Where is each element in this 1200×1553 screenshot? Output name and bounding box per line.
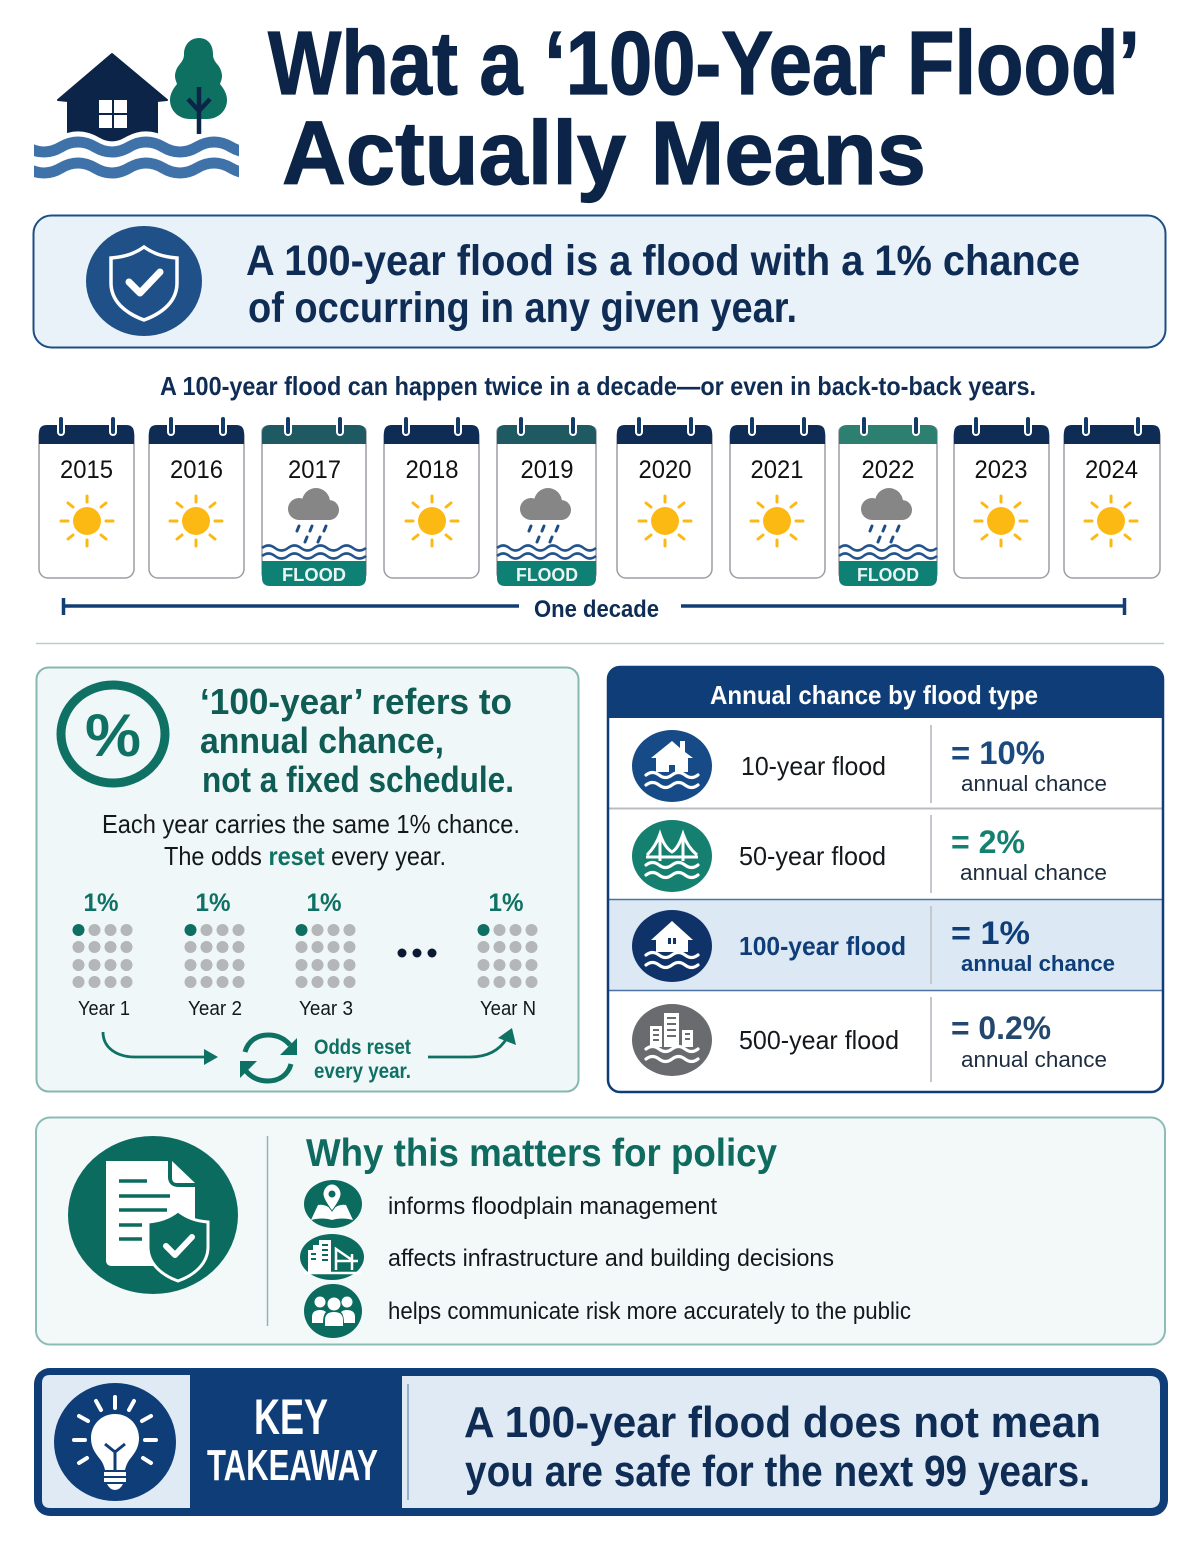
row: 50-year flood [632, 820, 1107, 892]
calendar 2017 flood: 2017 [288, 456, 341, 484]
calendar 2016 [149, 419, 244, 578]
heading: Why this matters for policy [306, 1132, 777, 1175]
highlight row [609, 900, 1162, 990]
table header [608, 667, 1163, 718]
reset label: every year. [314, 1060, 411, 1083]
heading: annual chance, [200, 720, 444, 761]
row: 10-year flood [632, 730, 1107, 802]
subheading: A 100-year flood can happen twice in a decade—or even in back-to-back years. [160, 371, 1036, 401]
definition text: A 100-year flood is a flood with a 1% chance [246, 237, 1080, 285]
row: 100-year flood: 100-year flood [739, 931, 906, 961]
icon: policy document with shield [68, 1136, 238, 1294]
panel: definition banner [34, 216, 1166, 348]
item: communicate risk to the public: helps communicate risk more accurately to the public [388, 1298, 911, 1325]
year 2 dots: 1% [196, 889, 230, 917]
definition text [246, 237, 1080, 332]
heading [200, 681, 514, 800]
row: 500-year flood: annual chance [961, 1047, 1107, 1072]
panel: annual chance by flood type table [608, 667, 1163, 1092]
calendar 2017 flood: FLOOD [282, 565, 346, 585]
icon: lightbulb [54, 1383, 176, 1501]
row: 50-year flood: = 2% [951, 824, 1025, 860]
arrow: year 1 to reset [103, 1032, 218, 1065]
calendar 2020: 2020 [638, 456, 692, 484]
icon: percent ring: % [85, 702, 141, 769]
calendar 2021 [730, 419, 825, 578]
body text: Each year carries the same 1% chance. [102, 809, 520, 839]
calendar 2018: 2018 [406, 456, 458, 484]
year 2 dots: Year 2 [188, 998, 242, 1020]
body text: The odds reset every year. [164, 841, 446, 871]
year 3 dots: 1% [306, 889, 342, 917]
calendar 2019 flood [497, 419, 596, 586]
calendar 2016: 2016 [170, 456, 223, 484]
row: 500-year flood [632, 1004, 1107, 1076]
calendar 2022 flood: 2022 [862, 456, 914, 484]
body text [102, 809, 520, 871]
calendar 2021: 2021 [750, 456, 804, 484]
calendar 2015 [39, 419, 134, 578]
icon: shield with check [86, 226, 202, 336]
panel: why this matters for policy [36, 1118, 1165, 1344]
reset label [314, 1036, 411, 1083]
calendar 2022 flood: FLOOD [857, 565, 919, 585]
year N dots: Year N [480, 998, 536, 1020]
row: 500-year flood: = 0.2% [951, 1010, 1051, 1046]
item: infrastructure and building decisions [300, 1234, 834, 1280]
heading: not a fixed schedule. [202, 759, 514, 800]
row: 100-year flood: annual chance [961, 951, 1115, 976]
item: floodplain management [304, 1180, 717, 1228]
calendar 2023: 2023 [974, 456, 1028, 484]
year 3 dots: Year 3 [299, 998, 353, 1020]
icon: reset cycle [240, 1035, 297, 1081]
row: 50-year flood: annual chance [960, 860, 1107, 885]
heading: ‘100-year’ refers to [200, 681, 512, 722]
year N dots [478, 889, 538, 1020]
ellipsis [398, 948, 436, 958]
year 1 dots: Year 1 [78, 998, 130, 1020]
takeaway message: you are safe for the next 99 years. [465, 1447, 1090, 1496]
row: 50-year flood: 50-year flood [739, 841, 886, 871]
decade span bracket [64, 596, 1124, 623]
takeaway message: A 100-year flood does not mean [464, 1398, 1101, 1447]
title: Actually Means [282, 104, 926, 204]
reset label: Odds reset [314, 1036, 411, 1059]
header: title with flood logo [34, 28, 1136, 204]
item: infrastructure and building decisions: affects infrastructure and building decisions [388, 1245, 834, 1272]
decade span bracket: One decade [534, 596, 659, 623]
definition text: of occurring in any given year. [248, 284, 797, 332]
panel: annual chance explanation [36, 668, 578, 1092]
row: 10-year flood: 10-year flood [741, 751, 886, 781]
row: 100-year flood: = 1% [951, 915, 1030, 951]
row: 500-year flood: 500-year flood [739, 1025, 899, 1055]
calendar 2019 flood: 2019 [520, 456, 574, 484]
title [268, 14, 1140, 204]
calendar 2024 [1064, 419, 1160, 578]
calendar 2017 flood [262, 419, 366, 586]
year 3 dots [296, 889, 356, 1020]
calendar 2022 flood [839, 419, 937, 586]
calendar 2018 [384, 419, 479, 578]
takeaway message [464, 1398, 1101, 1496]
year 2 dots [184, 889, 244, 1020]
item: communicate risk to the public [304, 1284, 911, 1338]
icon: percent ring [61, 685, 165, 783]
chart: decade calendar timeline [39, 419, 1160, 623]
year 1 dots: 1% [84, 889, 118, 917]
arrow: reset to year N [428, 1028, 516, 1057]
key takeaway label [207, 1389, 378, 1490]
year 1 dots [72, 889, 132, 1020]
panel: key takeaway [34, 1368, 1168, 1516]
calendar 2024: 2024 [1085, 456, 1138, 484]
row: 10-year flood: = 10% [951, 735, 1045, 771]
row: 10-year flood: annual chance [961, 771, 1107, 796]
key takeaway label: TAKEAWAY [207, 1441, 378, 1490]
calendar 2020 [617, 419, 712, 578]
calendar 2015: 2015 [60, 456, 113, 484]
table header: Annual chance by flood type [710, 680, 1038, 710]
calendar 2019 flood: FLOOD [516, 565, 578, 585]
calendar 2023 [954, 419, 1049, 578]
icon: flooded house and tree [34, 38, 239, 178]
item: floodplain management: informs floodplain management [388, 1193, 717, 1220]
key takeaway label: KEY [254, 1389, 328, 1445]
year N dots: 1% [488, 889, 524, 917]
row: 100-year flood [632, 910, 1115, 982]
